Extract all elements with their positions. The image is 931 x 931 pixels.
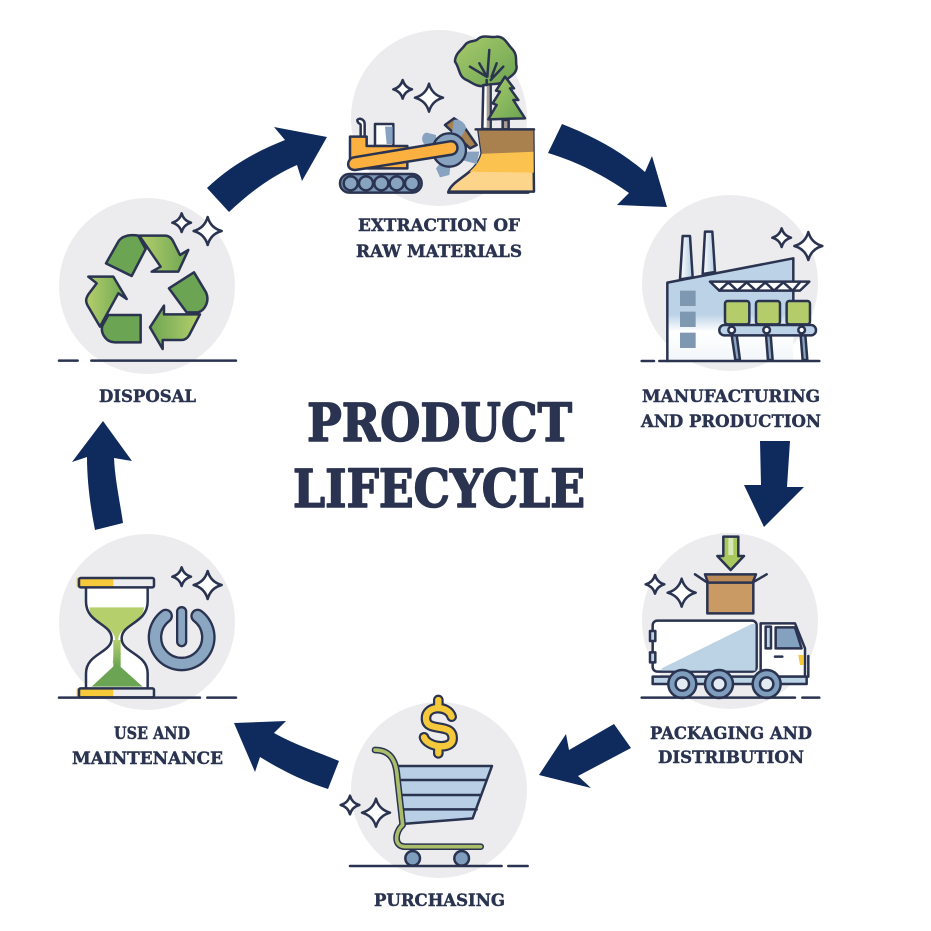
label: extraction of raw materials: EXTRACTION OF bbox=[358, 216, 520, 236]
label: disposal: DISPOSAL bbox=[99, 387, 196, 407]
panel: disposal bbox=[59, 198, 236, 407]
arrow: manufacturing to packaging bbox=[744, 441, 804, 527]
panel: purchasing bbox=[341, 700, 528, 911]
label: manufacturing and production: MANUFACTURING bbox=[642, 387, 820, 407]
icon: box and delivery truck bbox=[642, 537, 819, 698]
label: packaging and distribution bbox=[650, 724, 812, 768]
label: extraction of raw materials: RAW MATERIALS bbox=[356, 242, 522, 262]
arrow: packaging to purchasing bbox=[539, 724, 631, 788]
icon: hourglass and power button bbox=[59, 567, 236, 698]
panel: manufacturing and production bbox=[640, 195, 822, 432]
label: purchasing: PURCHASING bbox=[374, 891, 505, 911]
icon: shopping cart with dollar sign bbox=[341, 700, 528, 866]
icon: factory with conveyor bbox=[642, 228, 822, 361]
panel: packaging and distribution bbox=[642, 533, 819, 768]
label: use and maintenance: USE AND bbox=[114, 724, 190, 744]
label: extraction of raw materials bbox=[356, 216, 522, 262]
title: PRODUCT bbox=[307, 393, 572, 454]
label: packaging and distribution: PACKAGING AND bbox=[650, 724, 812, 744]
panel: extraction of raw materials bbox=[340, 30, 537, 262]
title: LIFECYCLE bbox=[293, 459, 585, 520]
arrow: disposal to extraction bbox=[207, 127, 327, 212]
label: manufacturing and production: AND PRODUCTION bbox=[640, 412, 821, 432]
icon: recycling symbol bbox=[59, 213, 236, 361]
label: use and maintenance bbox=[72, 724, 223, 769]
label: manufacturing and production bbox=[640, 387, 821, 432]
arrow: purchasing to use bbox=[234, 721, 339, 789]
label: use and maintenance: MAINTENANCE bbox=[72, 749, 223, 769]
label: packaging and distribution: DISTRIBUTION bbox=[658, 748, 804, 768]
title bbox=[293, 393, 585, 520]
icon: excavator, trees and soil bbox=[340, 36, 537, 193]
panel: use and maintenance bbox=[59, 534, 236, 769]
arrow: use to disposal bbox=[72, 421, 132, 530]
arrow: extraction to manufacturing bbox=[548, 124, 667, 207]
